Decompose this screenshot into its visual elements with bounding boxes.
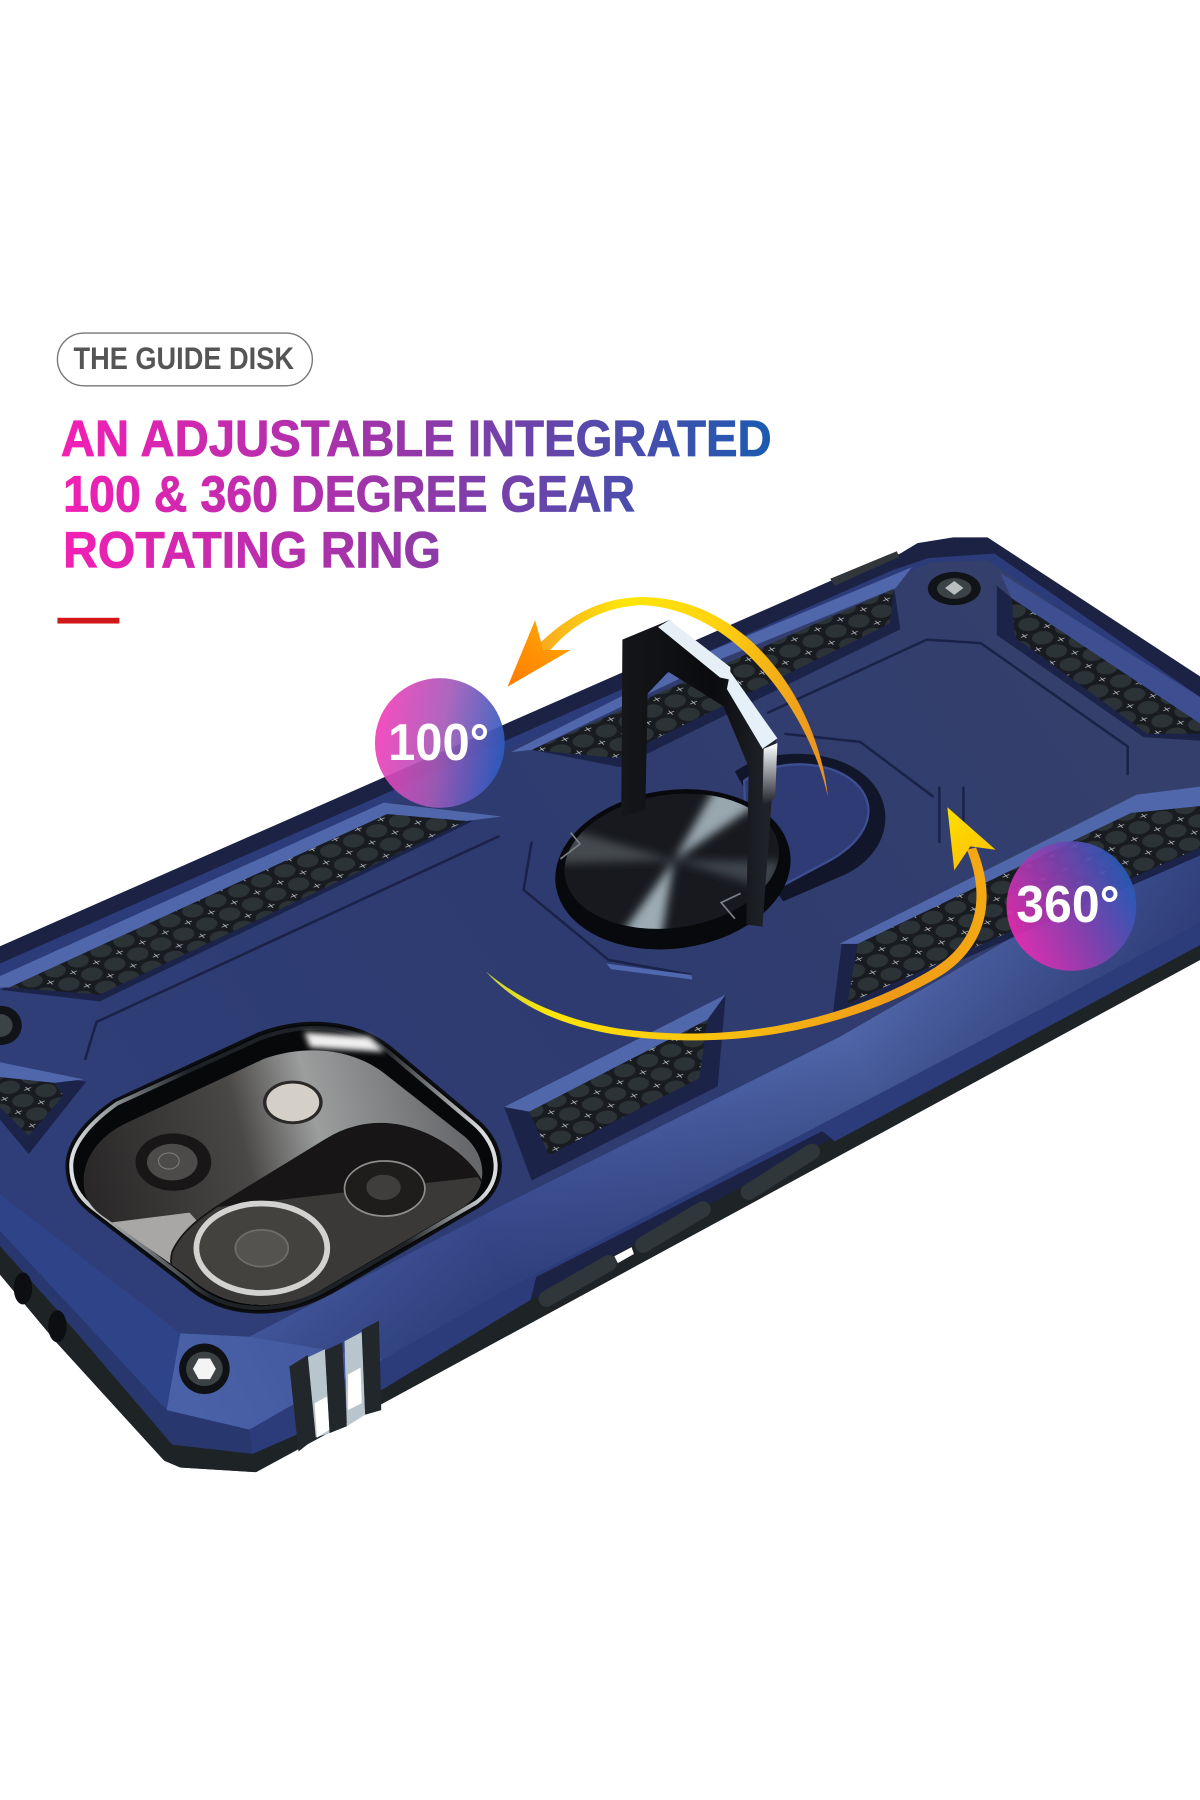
tag: the guide disk (57, 333, 312, 386)
ring handle (621, 620, 777, 927)
grip strips (0, 589, 1200, 1155)
lens glass (84, 1050, 482, 1305)
red accent bar (57, 618, 119, 624)
badge: 100 degrees: 100° (388, 713, 489, 771)
lower lens island (171, 1124, 483, 1309)
button notch (614, 1247, 634, 1263)
badge: 100 degrees (375, 678, 505, 808)
bevel highlights (0, 567, 1200, 1112)
tag: the guide disk: THE GUIDE DISK (73, 340, 294, 376)
heading: ROTATING RING (63, 521, 441, 578)
case silhouette (0, 537, 1200, 1472)
flash (263, 1081, 323, 1124)
ring base disc (555, 789, 791, 950)
heading: AN ADJUSTABLE INTEGRATED (61, 410, 772, 467)
top edge keys (830, 551, 899, 586)
infographic canvas (0, 332, 1200, 1472)
badge: 360 degrees (1007, 841, 1136, 971)
panel recess lines (85, 640, 1128, 1060)
badge: 360 degrees: 360° (1016, 875, 1120, 933)
antenna stripes (289, 1321, 381, 1451)
camera module (67, 1023, 501, 1321)
rim highlight (304, 1032, 385, 1052)
octagon highlight (606, 963, 692, 980)
port holes (14, 1272, 67, 1342)
grip recesses (0, 586, 1200, 1180)
heading (61, 410, 772, 578)
heading: 100 & 360 DEGREE GEAR (63, 466, 635, 523)
top face (0, 560, 1200, 1337)
arrow: 100 degree rotation (508, 597, 828, 797)
left side band (0, 1194, 180, 1410)
side buttons (547, 1152, 812, 1299)
band lower shading (249, 829, 1200, 1360)
lower side of corner (0, 1231, 253, 1454)
screw: bottom corner (179, 1344, 230, 1394)
lens two (344, 1161, 425, 1216)
screw: left edge (0, 1006, 22, 1045)
phone case (0, 537, 1200, 1472)
lens three (196, 1203, 327, 1293)
bright side band (167, 829, 1200, 1430)
right corner bevel (1000, 573, 1200, 723)
arrow: 360 degree rotation (486, 807, 996, 1040)
lower glass reflection (112, 1212, 272, 1305)
lower black edge (0, 942, 1200, 1472)
bumper body (0, 553, 1200, 1454)
ring slot (735, 754, 885, 901)
screw: top corner (928, 572, 981, 605)
lens one (136, 1133, 211, 1191)
